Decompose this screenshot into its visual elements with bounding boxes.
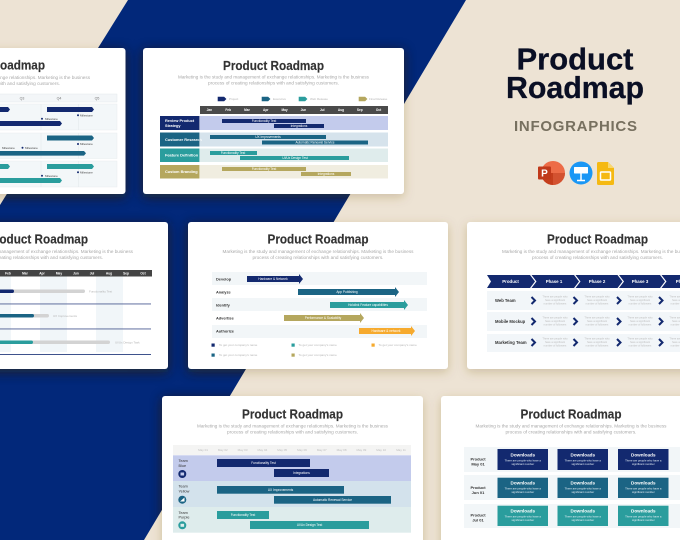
month header: Feb — [5, 272, 11, 276]
row: marketing team: have a significant — [630, 340, 650, 344]
row: May 01: There are people who have a — [565, 459, 601, 463]
date header: May 10 — [376, 448, 386, 452]
row: feature definition: UI/Ux Design Test — [282, 156, 308, 160]
row: review product strategy: Functionality Test — [252, 119, 276, 123]
date header: May 05 — [277, 448, 287, 452]
month header: Mar — [22, 272, 29, 276]
row: Jul 01: Downloads — [571, 508, 595, 514]
date header: May 08 — [337, 448, 347, 452]
legend: To get your company's name — [298, 353, 337, 357]
row: Jul 01: Downloads — [631, 508, 656, 514]
progress row: UX improvements: UX Improvements — [53, 314, 78, 318]
icon: team blue — [178, 470, 186, 478]
row: mobile mockup: number of followers — [544, 322, 567, 326]
row: Jun 01: significant number — [511, 490, 534, 494]
row: May 01: There are people who have a — [505, 459, 541, 463]
chevron header: Phase 3 — [632, 279, 649, 284]
row: web team: have a significant — [545, 298, 565, 302]
row: mobile mockup — [487, 312, 680, 331]
month header: Jul — [90, 272, 94, 276]
background: navy diagonal band — [0, 0, 466, 540]
row: May 01: There are people who have a — [625, 459, 662, 463]
row: Jul 01: significant number — [632, 518, 655, 522]
subtitle: Marketing is the study and management of exchange relationships. Marketing is the business — [476, 424, 667, 428]
row: Jul 01: There are people who have a — [505, 515, 541, 519]
subtitle: Marketing is the study and management of exchange relationships. Marketing is the business — [222, 249, 414, 254]
month header: Aug — [106, 272, 112, 276]
arrow: authorize — [216, 326, 415, 336]
arrow: analyze: Analyze — [216, 289, 232, 294]
row: marketing team: have a significant — [587, 340, 607, 344]
row: team yellow: Automatic Renewal Service — [313, 498, 352, 502]
subtitle: process of creating relationships with and satisfying customers. — [506, 430, 636, 434]
row: blue timeline: Milestone — [2, 146, 15, 150]
icon: PowerPoint — [538, 161, 565, 185]
row: mobile mockup: have a significant — [545, 319, 565, 323]
row: web team: There are people who — [542, 294, 568, 298]
legend: Project — [229, 97, 239, 101]
row: Jul 01: significant number — [571, 518, 594, 522]
progress row: functionality — [0, 290, 151, 304]
month header: Aug — [338, 108, 344, 112]
row: web team: have a significant — [587, 298, 607, 302]
date header: May 07 — [317, 448, 327, 452]
row: marketing team: There are people who — [627, 336, 653, 340]
arrow: develop — [216, 274, 303, 284]
row: team blue: Integrations — [293, 471, 310, 475]
month header: Oct — [376, 108, 382, 112]
arrow: identify: Hololink Feature capabilities — [348, 303, 388, 307]
legend: To get your company's name — [219, 353, 258, 357]
panel: downloads grid roadmap (cropped right and bottom) — [441, 396, 680, 540]
subtitle: Marketing is the study and management of exchange relationships. Marketing is the business — [197, 424, 389, 428]
icon: team purple — [178, 521, 186, 529]
panel: monthly swimlane roadmap — [143, 48, 404, 194]
subtitle — [222, 249, 414, 260]
row: mobile mockup: There are people who — [542, 316, 568, 320]
month header: Mar — [244, 108, 251, 112]
row: Jul 01: Downloads — [511, 508, 535, 514]
row: teal timeline: Milestone — [80, 170, 93, 174]
row: Jun 01: There are people who have a — [505, 487, 541, 491]
month header: May — [56, 272, 62, 276]
arrow: identify — [216, 300, 408, 310]
legend — [218, 97, 388, 101]
subtitle: Marketing is the study and management of exchange relationships. Marketing is the business — [502, 249, 680, 254]
progress row: UI design — [0, 340, 151, 355]
month header: Sep — [357, 108, 363, 112]
row: team purple — [173, 507, 411, 533]
row: web team: have a significant — [630, 298, 650, 302]
panel: progress gantt (cropped left) — [0, 222, 168, 369]
heading: Product Roadmap — [520, 408, 622, 422]
date header: May 02 — [218, 448, 228, 452]
month header: Jun — [301, 108, 306, 112]
row: May 01: Product — [470, 456, 486, 462]
row: web team — [487, 291, 680, 310]
arrow: identify: Identify — [216, 302, 231, 307]
chevron header: Product — [502, 279, 519, 284]
heading: Product Roadmap — [242, 408, 343, 422]
progress row: functionality: Functionality Test — [89, 290, 112, 294]
row: marketing team: There are people who — [542, 336, 568, 340]
row: marketing team: number of followers — [629, 344, 652, 348]
row: web team: Web Team — [495, 298, 516, 303]
row: mobile mockup: have a significant — [630, 319, 650, 323]
row: team yellow: UX Improvements — [268, 488, 294, 492]
row: feature definition: Feature Definition — [165, 153, 199, 158]
row: navy timeline — [0, 104, 117, 130]
quarter header — [0, 94, 117, 102]
row: mobile mockup: There are people who — [584, 316, 610, 320]
striped rows — [212, 272, 427, 338]
row: mobile mockup: Mobile Mockup — [495, 319, 526, 324]
date header: May 03 — [238, 448, 248, 452]
subtitle: Marketing is the study and management of exchange relationships. Marketing is the business — [178, 74, 370, 80]
row: review product strategy: Integrations — [291, 124, 308, 128]
icon: PowerPoint: P — [541, 168, 548, 180]
icon: Google Slides — [597, 162, 614, 185]
row: Jul 01: significant number — [511, 518, 534, 522]
legend: To get your company's name — [378, 343, 417, 347]
row: web team: There are people who — [627, 294, 653, 298]
row: May 01: significant number — [571, 462, 594, 466]
main title: Product — [516, 42, 634, 76]
subtitle: process of creating relationships with and satisfying customers. — [252, 255, 384, 260]
row: Jul 01: There are people who have a — [625, 515, 662, 519]
arrow: advertise: Performance & Scalability — [305, 316, 342, 320]
row: custom branding: Functionality Test — [252, 167, 276, 171]
row: May 01: significant number — [511, 462, 534, 466]
quarter header: Q4 — [57, 96, 61, 100]
progress row: UX improvements — [0, 314, 151, 329]
row: custom branding: Integrations — [318, 172, 335, 176]
row: marketing team: number of followers — [544, 344, 567, 348]
row: customer research — [160, 132, 388, 146]
row: marketing team: have a significant — [545, 340, 565, 344]
main title — [506, 42, 644, 105]
legend: Executive — [273, 97, 286, 101]
row: team purple: UI/Ux Design Test — [297, 523, 322, 527]
row: Jul 01: Jul 01 — [472, 518, 484, 522]
date header — [173, 445, 411, 455]
subtitle: process of creating relationships with and satisfying customers. — [208, 80, 339, 86]
row: mobile mockup: number of followers — [629, 322, 652, 326]
row: team blue — [173, 455, 411, 481]
row: team purple: Team — [178, 511, 188, 515]
legend: To get your company's name — [219, 343, 258, 347]
quarter header: Q5 — [95, 96, 99, 100]
heading: Product Roadmap — [547, 232, 648, 246]
row: web team: number of followers — [586, 302, 609, 306]
month header: Feb — [225, 108, 231, 112]
row: customer research: UX Improvements — [255, 135, 281, 139]
legend: Final Release — [369, 97, 388, 101]
row: Jun 01: There are people who have a — [565, 487, 601, 491]
row: customer research: Automatic Renewal Service — [296, 141, 335, 145]
row: May 01: May 01 — [471, 462, 485, 466]
legend — [212, 343, 417, 357]
row: feature definition: Functionality Test — [221, 151, 245, 155]
heading: Product Roadmap — [223, 59, 324, 73]
arrow: advertise — [216, 313, 364, 323]
row: team yellow: Yellow — [178, 490, 190, 494]
row: marketing team — [487, 334, 680, 352]
row: Jun 01: Product — [470, 485, 486, 490]
legend: Web Release — [310, 97, 328, 101]
row: blue timeline — [0, 133, 117, 158]
row: web team: number of followers — [629, 302, 652, 306]
heading: Product Roadmap — [268, 232, 369, 246]
arrow: authorize: Authorize — [216, 328, 235, 333]
row: review product strategy: Review Product — [165, 118, 195, 123]
row: marketing team: Marketing Team — [495, 340, 527, 345]
row: team blue: Blue — [178, 464, 186, 468]
main title: Roadmap — [506, 70, 644, 105]
row: marketing team: number of followers — [586, 344, 609, 348]
row: customer research: Customer Research — [165, 137, 202, 142]
subtitle — [476, 424, 667, 434]
row: Jun 01: Downloads — [571, 480, 595, 486]
row: Jun 01: Downloads — [511, 480, 535, 486]
row: Jun 01: There are people who have a — [625, 487, 662, 491]
panel: arrow timeline roadmap — [188, 222, 448, 369]
month header: Oct — [140, 272, 147, 276]
row: blue timeline: Milestone — [25, 146, 38, 150]
subtitle — [502, 249, 680, 260]
row: Jun 01: significant number — [632, 490, 655, 494]
row: May 01: Downloads — [631, 452, 656, 458]
chevron header: Phase 1 — [546, 279, 563, 284]
row: mobile mockup: number of followers — [586, 322, 609, 326]
chevron header: Phase 2 — [589, 279, 606, 284]
row: Jul 01 — [464, 504, 680, 528]
arrow: advertise: Advertise — [216, 315, 235, 320]
date header: May 11 — [396, 448, 406, 452]
row: teal timeline — [0, 161, 117, 187]
subheading: infographics: INFOGRAPHICS — [514, 118, 637, 135]
arrow: develop: Develop — [216, 276, 232, 281]
legend: To get your company's name — [298, 343, 337, 347]
row: May 01: Downloads — [571, 452, 595, 458]
subtitle: process of creating relationships with and satisfying customers. — [227, 430, 358, 434]
row: team blue: Team — [178, 459, 188, 463]
row: web team: There are people who — [584, 294, 610, 298]
subtitle — [197, 424, 389, 434]
chevron header — [487, 275, 680, 288]
icon: Keynote — [570, 162, 592, 184]
month header: Apr — [263, 108, 269, 112]
row: navy timeline: Milestone — [80, 113, 93, 117]
date header: May 06 — [297, 448, 307, 452]
month header: May — [281, 108, 288, 112]
row: May 01 — [464, 447, 680, 472]
row: team yellow — [173, 481, 411, 507]
subtitle — [178, 74, 370, 86]
month header: Apr — [39, 272, 45, 276]
row: team purple: Purple — [178, 515, 189, 519]
arrow: authorize: Hardware & network — [372, 329, 401, 333]
month header: Jan — [207, 108, 212, 112]
subtitle: process of creating relationships with and satisfying customers. — [532, 255, 663, 260]
row: Jun 01 — [464, 475, 680, 500]
subtitle — [0, 249, 134, 260]
row: Jun 01: significant number — [571, 490, 594, 494]
row: May 01: significant number — [632, 462, 655, 466]
row: team blue: Functionality Test — [251, 461, 276, 465]
row: Jul 01: Product — [470, 512, 486, 518]
panel: team gantt roadmap (cropped bottom) — [162, 396, 423, 540]
icon: team yellow — [178, 496, 186, 504]
subtitle — [0, 75, 91, 86]
date header: May 01 — [198, 448, 208, 452]
date header: May 04 — [257, 448, 268, 452]
row: review product strategy: Strategy — [165, 123, 181, 128]
row: custom branding — [160, 165, 388, 178]
progress row: UI design: UI/Ux Design Task — [115, 340, 140, 344]
row: May 01: Downloads — [511, 452, 535, 458]
quarter header: Q3 — [20, 96, 24, 100]
month header: Jun — [73, 272, 79, 276]
month header — [200, 106, 388, 114]
row: Jun 01: Downloads — [631, 480, 656, 486]
date header: May 09 — [356, 448, 367, 452]
row: feature definition — [160, 148, 388, 162]
arrow: analyze — [216, 287, 399, 297]
row: marketing team: There are people who — [584, 336, 610, 340]
row: web team: number of followers — [544, 302, 567, 306]
row: team yellow: Team — [178, 484, 188, 488]
month header: Jul — [320, 108, 325, 112]
row: mobile mockup: There are people who — [627, 316, 653, 320]
row: blue timeline: Milestone — [80, 142, 93, 146]
month header — [0, 270, 152, 276]
panel: quarterly milestones roadmap (cropped left) — [0, 48, 126, 194]
row: team purple: Functionality Test — [231, 513, 255, 517]
panel: phase chevrons roadmap (cropped right) — [467, 222, 680, 369]
month header: Sep — [123, 272, 129, 276]
row: Jun 01: Jun 01 — [472, 490, 485, 495]
arrow: develop: Hardware & Network — [258, 277, 288, 281]
row: mobile mockup: have a significant — [587, 319, 607, 323]
row: review product strategy — [160, 116, 388, 130]
row: teal timeline: Milestone — [45, 174, 58, 178]
row: Jul 01: There are people who have a — [565, 515, 601, 519]
row: navy timeline: Milestone — [45, 117, 58, 121]
alternating month columns — [0, 276, 123, 352]
row: custom branding: Custom Branding — [165, 169, 198, 174]
arrow: analyze: App Publishing — [336, 290, 358, 294]
